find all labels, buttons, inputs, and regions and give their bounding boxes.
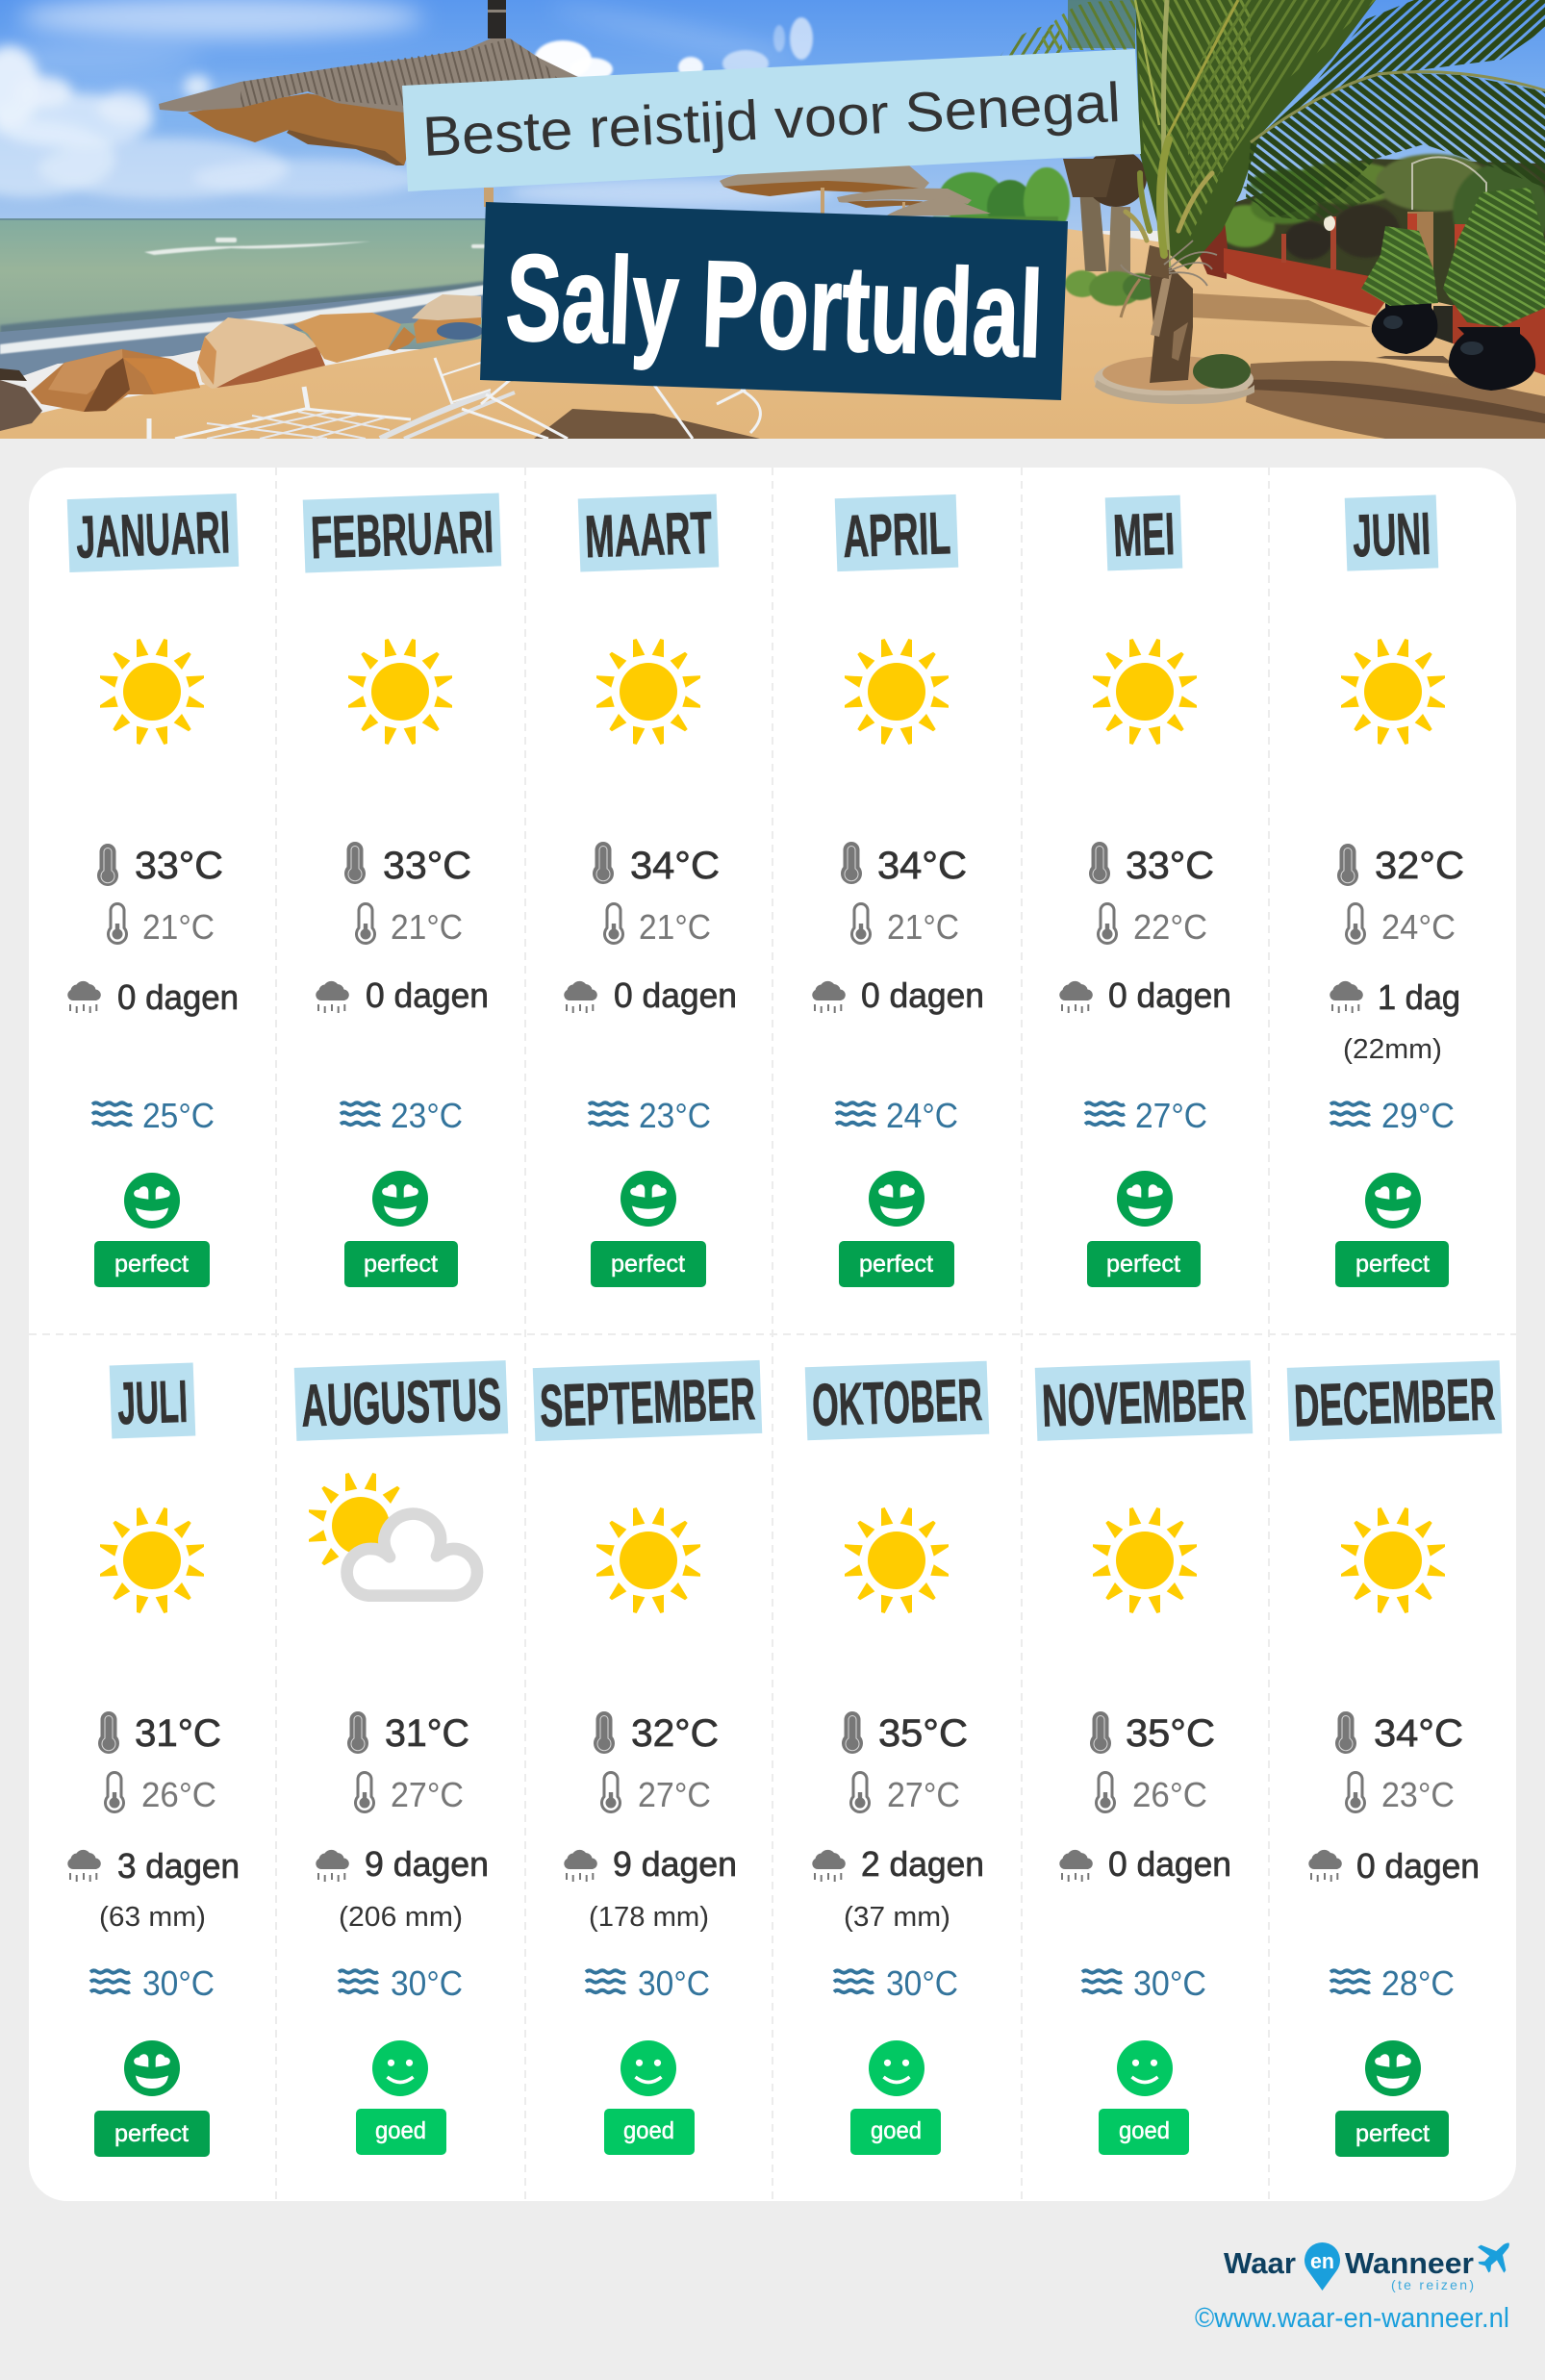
rain days: 1 dag [1378, 977, 1460, 1017]
water temperature: 24°C [886, 1096, 958, 1135]
big straw umbrella [159, 0, 582, 207]
icon: love smiley [124, 1173, 180, 1228]
icon: thermometer high [595, 843, 612, 883]
sand [0, 229, 1545, 439]
month label: JANUARI [75, 499, 231, 571]
foam [0, 285, 486, 354]
icon: rain [564, 1850, 597, 1882]
max temperature: 35°C [878, 1712, 968, 1755]
header photo: beach scene [0, 0, 1545, 439]
central palm trunk [1145, 245, 1193, 383]
sea [0, 220, 485, 349]
month label: JUNI [1352, 501, 1431, 570]
left distant palm [1000, 0, 1135, 56]
website credit: ©www.waar-en-wanneer.nl [1195, 2303, 1509, 2334]
rating badge [604, 2109, 695, 2155]
icon: water [586, 1970, 625, 1992]
month label [1105, 495, 1182, 570]
logo: Waar en Wanneer [1224, 2242, 1509, 2292]
rain days: 3 dagen [117, 1846, 240, 1886]
icon: rain [1330, 981, 1363, 1013]
rating badge: perfect [114, 1251, 189, 1278]
icon: rain [812, 981, 846, 1013]
icon: map pin: en [1310, 2249, 1334, 2273]
icon: love smiley [1117, 1171, 1173, 1227]
month label: APRIL [842, 500, 951, 570]
month label: MEI [1112, 501, 1176, 570]
side table [437, 322, 483, 340]
cell: mei [1059, 495, 1231, 1287]
icon: rain [316, 981, 349, 1013]
title text: Saly Portudal [504, 229, 1045, 384]
rating badge: goed [375, 2117, 426, 2144]
rock 1 [31, 349, 200, 412]
icon: love smiley [124, 2040, 180, 2096]
rain amount: (206 mm) [339, 1902, 463, 1933]
min temperature: 21°C [142, 907, 215, 947]
icon: airplane [1478, 2243, 1509, 2273]
rating badge: perfect [364, 1251, 438, 1278]
icon: water [589, 1102, 628, 1125]
icon: rain [1308, 1850, 1342, 1882]
rock 3 [293, 313, 416, 363]
rating badge: perfect [611, 1251, 685, 1278]
water temperature: 30°C [1133, 1963, 1206, 2003]
icon: water [341, 1102, 380, 1125]
water temperature: 30°C [886, 1963, 958, 2003]
icon: thermometer high [843, 1712, 862, 1753]
rating badge [1099, 2109, 1189, 2155]
icon: sun [845, 639, 949, 745]
max temperature: 31°C [135, 1712, 221, 1755]
month label: OKTOBER [811, 1367, 983, 1439]
sky [0, 0, 1545, 231]
rating badge: goed [871, 2117, 922, 2144]
subtitle text: Beste reistijd voor Senegal [421, 71, 1122, 168]
icon: thermometer high [1091, 1712, 1110, 1753]
rating badge: perfect [859, 1251, 933, 1278]
icon: thermometer low [356, 1772, 373, 1812]
clay pots [1372, 303, 1535, 391]
rain days: 9 dagen [613, 1844, 737, 1884]
icon: rain [67, 1850, 101, 1882]
rock 4 [412, 294, 481, 343]
arch trellis [1412, 157, 1486, 210]
icon: rain [1059, 981, 1093, 1013]
icon: good smiley [621, 2040, 676, 2096]
big cumulus clouds [0, 46, 837, 206]
far palm trunks [1063, 149, 1147, 274]
cell: december [1287, 1360, 1502, 2157]
water temperature: 23°C [391, 1096, 463, 1135]
water temperature: 23°C [639, 1096, 711, 1135]
icon: sun [596, 1507, 700, 1613]
icon: thermometer high [1337, 1712, 1355, 1753]
icon: good smiley [372, 2040, 428, 2096]
icon: sun behind cloud [309, 1473, 477, 1596]
icon: thermometer high [346, 843, 364, 883]
water temperature: 28°C [1381, 1963, 1455, 2003]
icon: sun [1341, 639, 1445, 745]
month label [533, 1360, 762, 1441]
palm spines [1135, 0, 1545, 269]
month label: FEBRUARI [310, 499, 494, 571]
month label [110, 1362, 195, 1438]
rain days: 0 dagen [1108, 1844, 1231, 1884]
month label: JULI [116, 1369, 189, 1437]
icon: sun [845, 1507, 949, 1613]
max temperature: 35°C [1126, 1712, 1215, 1755]
dry fronds [1121, 241, 1217, 317]
rating badge: perfect [1355, 1251, 1430, 1278]
month label: AUGUSTUS [300, 1366, 502, 1440]
icon: map pin [1304, 2242, 1340, 2291]
icon: love smiley [1365, 2040, 1421, 2096]
icon: thermometer low [1097, 1772, 1114, 1812]
icon: thermometer low [106, 1772, 123, 1812]
rating badge [850, 2109, 941, 2155]
month label: SEPTEMBER [539, 1366, 756, 1440]
hedge behind fence [1217, 154, 1545, 327]
max temperature: 33°C [135, 845, 223, 887]
rating badge: goed [1119, 2117, 1170, 2144]
month label: NOVEMBER [1041, 1366, 1247, 1440]
rating badge [94, 2111, 210, 2157]
palm leaflets, right of stem [1184, 0, 1376, 187]
planter with small bush [1094, 354, 1254, 404]
cell: juli [67, 1362, 240, 2157]
max temperature: 32°C [1375, 845, 1464, 887]
rain days: 0 dagen [1108, 975, 1231, 1015]
pot highlights [1383, 316, 1483, 355]
rain amount: (63 mm) [99, 1902, 206, 1933]
month label [1035, 1360, 1253, 1441]
min temperature: 26°C [141, 1775, 216, 1814]
rating badge [356, 2109, 446, 2155]
icon: sun [348, 639, 452, 745]
rain days: 0 dagen [614, 975, 737, 1015]
icon: thermometer low [1347, 904, 1364, 944]
frond: upper leaflets [1268, 0, 1545, 128]
min temperature: 21°C [639, 907, 711, 947]
max temperature: 34°C [877, 845, 967, 887]
rating badge: perfect [1355, 2120, 1430, 2147]
min temperature: 27°C [638, 1775, 711, 1814]
icon: love smiley [1365, 1173, 1421, 1228]
small straw umbrellas [720, 165, 991, 221]
icon: love smiley [621, 1171, 676, 1227]
frond: lower leaflets [1246, 72, 1545, 216]
icon: rain [564, 981, 597, 1013]
cell: juni [1330, 494, 1464, 1287]
icon: water [834, 1970, 874, 1992]
month label [835, 494, 958, 571]
water temperature: 29°C [1381, 1096, 1455, 1135]
cell: oktober [805, 1361, 989, 2155]
rating badge [1087, 1241, 1201, 1287]
shallow water [0, 287, 486, 377]
month label [1345, 494, 1438, 571]
logo word: Wanneer: Wanneer [1345, 2246, 1474, 2280]
red gate [1200, 224, 1228, 279]
lower palm leaflets over hedge [1241, 164, 1385, 221]
rain amount: (22mm) [1343, 1034, 1442, 1065]
sand shadows [534, 293, 1545, 439]
cirrus streaks [0, 0, 798, 101]
wave crests [144, 238, 486, 255]
icon: thermometer high [843, 843, 860, 883]
sun lounger [149, 358, 760, 439]
icon: sun [1093, 639, 1197, 745]
dark swell band [0, 281, 486, 335]
icon: thermometer low [1347, 1772, 1364, 1812]
subtitle banner [402, 49, 1141, 191]
icon: love smiley [372, 1171, 428, 1227]
rating badge [1335, 1241, 1449, 1287]
rain amount: (37 mm) [844, 1902, 950, 1933]
rating badge: goed [623, 2117, 674, 2144]
bright young palm leaves [1126, 139, 1212, 255]
water temperature: 27°C [1135, 1096, 1207, 1135]
month label [303, 493, 501, 573]
far green trees [932, 165, 1072, 221]
icon: rain [812, 1850, 846, 1882]
icon: sun [100, 639, 204, 745]
icon: water [1085, 1102, 1125, 1125]
small white clouds [534, 17, 813, 81]
icon: thermometer low [602, 1772, 620, 1812]
rating badge [344, 1241, 458, 1287]
icon: love smiley [869, 1171, 924, 1227]
rating badge: perfect [1106, 1251, 1180, 1278]
month label [805, 1361, 989, 1440]
far-left dark rocks [0, 368, 42, 431]
rating badge: perfect [114, 2120, 189, 2147]
water temperature: 30°C [142, 1963, 215, 2003]
logo tagline: (te reizen) [1391, 2277, 1474, 2292]
potted shrubs [1361, 188, 1545, 327]
icon: thermometer high [595, 1712, 614, 1753]
central palm mass [1135, 0, 1376, 269]
icon: thermometer high [1339, 845, 1356, 885]
icon: thermometer high [100, 1712, 117, 1753]
cell: januari [67, 494, 239, 1287]
min temperature: 24°C [1381, 907, 1456, 947]
icon: rain [316, 1850, 349, 1882]
icon: rain [67, 981, 101, 1013]
icon: water [92, 1102, 132, 1125]
icon: good smiley [869, 2040, 924, 2096]
icon: thermometer low [1099, 904, 1116, 944]
icon: sun [1341, 1507, 1445, 1613]
icon: good smiley [1117, 2040, 1173, 2096]
month label [294, 1360, 508, 1441]
icon: thermometer low [850, 1772, 870, 1812]
max temperature: 32°C [631, 1712, 719, 1755]
rain days: 0 dagen [117, 977, 239, 1017]
month label: MAART [584, 500, 713, 570]
rating badge [1335, 2111, 1449, 2157]
cell: maart [564, 494, 737, 1287]
logo word: Waar: Waar [1224, 2246, 1296, 2280]
red walls and pillars [1224, 212, 1545, 375]
icon: thermometer high [98, 845, 117, 885]
title banner [480, 202, 1068, 400]
icon: water [1082, 1970, 1122, 1992]
cell: september [533, 1360, 762, 2155]
min temperature: 23°C [1381, 1775, 1455, 1814]
icon: sun [596, 639, 700, 745]
icon: thermometer low [108, 904, 127, 944]
min temperature: 27°C [391, 1775, 464, 1814]
panel: monthly climate card [29, 468, 1516, 2201]
icon: thermometer high [348, 1712, 367, 1753]
min temperature: 27°C [887, 1775, 960, 1814]
min temperature: 22°C [1133, 907, 1207, 947]
max temperature: 33°C [383, 845, 471, 887]
icon: thermometer low [852, 904, 870, 944]
rain days: 0 dagen [366, 975, 489, 1015]
rain amount: (178 mm) [589, 1902, 709, 1933]
left shrubs on sand [1065, 270, 1157, 306]
cell: februari [303, 493, 501, 1287]
icon: thermometer low [356, 904, 375, 944]
icon: water [836, 1102, 875, 1125]
rain days: 2 dagen [861, 1844, 984, 1884]
cell: augustus [294, 1360, 508, 2155]
icon: sun [100, 1507, 204, 1613]
rain days: 0 dagen [1356, 1846, 1480, 1886]
rain days: 0 dagen [861, 975, 984, 1015]
max temperature: 31°C [385, 1712, 469, 1755]
water temperature: 25°C [142, 1096, 215, 1135]
water temperature: 30°C [638, 1963, 710, 2003]
water temperature: 30°C [391, 1963, 463, 2003]
cell: november [1035, 1360, 1253, 2155]
min temperature: 21°C [887, 907, 959, 947]
icon: water [90, 1970, 130, 1992]
min temperature: 26°C [1132, 1775, 1207, 1814]
rating badge [839, 1241, 954, 1287]
month label [578, 494, 719, 571]
rain days: 9 dagen [365, 1844, 489, 1884]
icon: rain [1059, 1850, 1093, 1882]
icon: thermometer low [604, 904, 623, 944]
max temperature: 34°C [1374, 1712, 1463, 1755]
rating badge [94, 1241, 210, 1287]
month label [67, 494, 239, 572]
min temperature: 21°C [391, 907, 463, 947]
rating badge [591, 1241, 706, 1287]
palm leaflets, bright [1135, 0, 1251, 241]
icon: water [1330, 1102, 1370, 1125]
icon: water [339, 1970, 378, 1992]
max temperature: 34°C [630, 845, 720, 887]
rock 2 [197, 317, 325, 389]
max temperature: 33°C [1126, 845, 1214, 887]
icon: water [1330, 1970, 1370, 1992]
icon: sun [1093, 1507, 1197, 1613]
cell: april [812, 494, 984, 1287]
icon: thermometer high [1091, 843, 1108, 883]
